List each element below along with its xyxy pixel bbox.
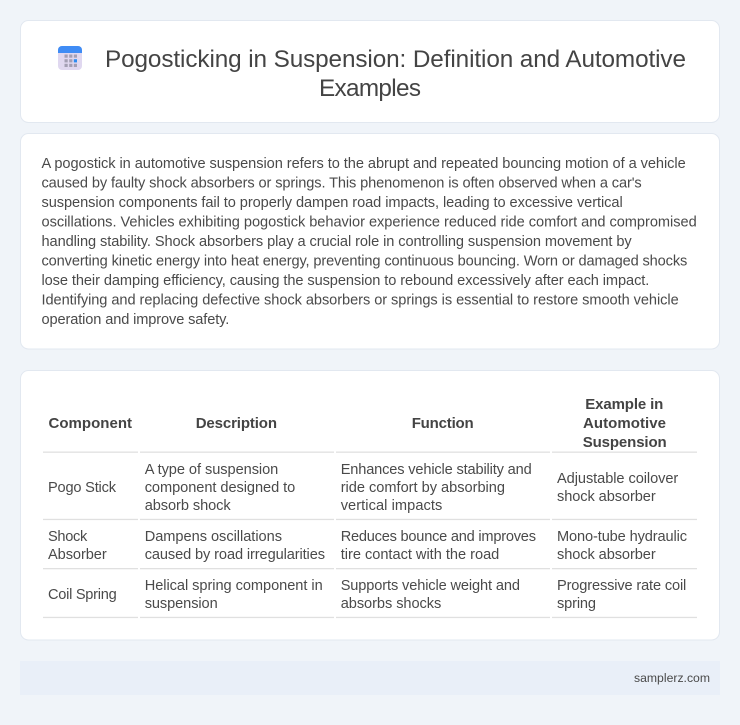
table row: Shock Absorber: Reduces bounce and improves xyxy=(341,529,536,545)
footer: samplerz.com xyxy=(634,671,710,685)
table row: Coil Spring: absorbs shocks xyxy=(341,596,441,612)
text block: description paragraph: A pogostick in automotive suspension refers to the abrupt and repeated bouncing motion of a vehicle xyxy=(42,156,686,172)
title: Pogosticking in Suspension: Definition and Automotive xyxy=(105,46,686,73)
table row: Pogo Stick: Adjustable coilover xyxy=(557,471,678,487)
text block: description paragraph: caused by faulty shock absorbers or springs. This phenomenon is often observed when a car's xyxy=(42,176,642,192)
text block: description paragraph xyxy=(42,156,697,328)
table row: Pogo Stick: ride comfort by absorbing xyxy=(341,480,505,496)
title: Examples xyxy=(319,75,421,102)
table row: Coil Spring xyxy=(43,578,697,618)
table row: Coil Spring: Coil Spring xyxy=(48,587,117,603)
table row: Coil Spring: suspension xyxy=(145,596,218,612)
table header row: Automotive xyxy=(583,415,666,432)
table header row xyxy=(43,396,697,453)
table row: Pogo Stick xyxy=(43,462,697,520)
text block: description paragraph: converting kinetic energy into heat energy, preventing continuous bouncing. Worn or damaged shocks xyxy=(42,254,687,270)
table header row: Example in xyxy=(585,396,663,413)
table row: Shock Absorber: caused by road irregularities xyxy=(145,547,325,563)
text block: description paragraph: suspension components fail to properly dampen road impacts, leading to excessive vertical xyxy=(42,195,623,211)
table row: Pogo Stick: A type of suspension xyxy=(145,462,278,478)
table header row: Description xyxy=(196,415,277,432)
icon: calendar xyxy=(58,46,82,70)
table row: Pogo Stick: shock absorber xyxy=(557,489,656,505)
table row: Shock Absorber: Absorber xyxy=(48,547,107,563)
text block: description paragraph: handling stability. Shock absorbers play a crucial role in controlling suspension movement by xyxy=(42,234,632,250)
panel: description xyxy=(20,134,720,349)
table row: Coil Spring: spring xyxy=(557,596,596,612)
text block: description paragraph: oscillations. Vehicles exhibiting pogostick behavior experience reduced ride comfort and compromised xyxy=(42,214,697,230)
table row: Shock Absorber: Dampens oscillations xyxy=(145,529,282,545)
table row: Shock Absorber: shock absorber xyxy=(557,547,656,563)
table row: Pogo Stick: vertical impacts xyxy=(341,498,442,514)
footer xyxy=(20,661,720,695)
table row: Coil Spring: Progressive rate coil xyxy=(557,578,686,594)
text block: description paragraph: Identifying and replacing defective shock absorbers or springs is essential to restore smooth vehicle xyxy=(42,292,679,308)
table header row: Suspension xyxy=(583,434,667,451)
panel: components table xyxy=(20,370,720,640)
table row: Pogo Stick: Enhances vehicle stability and xyxy=(341,462,532,478)
table row: Shock Absorber xyxy=(43,529,697,569)
table header row: Component xyxy=(48,415,132,432)
table row: Shock Absorber: Shock xyxy=(48,529,88,545)
table row: Coil Spring: Helical spring component in xyxy=(145,578,323,594)
table row: Pogo Stick: Pogo Stick xyxy=(48,480,117,496)
text block: description paragraph: operation and improve safety. xyxy=(42,312,229,328)
table row: Shock Absorber: Mono-tube hydraulic xyxy=(557,529,687,545)
panel: title header xyxy=(20,20,720,122)
table row: Pogo Stick: component designed to xyxy=(145,480,295,496)
table row: Shock Absorber: tire contact with the road xyxy=(341,547,499,563)
text block: description paragraph: lose their damping efficiency, causing the suspension to rebound excessively after each impact. xyxy=(42,273,649,289)
table row: Coil Spring: Supports vehicle weight and xyxy=(341,578,520,594)
table row: Pogo Stick: absorb shock xyxy=(145,498,231,514)
table header row: Function xyxy=(412,415,474,432)
title xyxy=(105,46,686,102)
